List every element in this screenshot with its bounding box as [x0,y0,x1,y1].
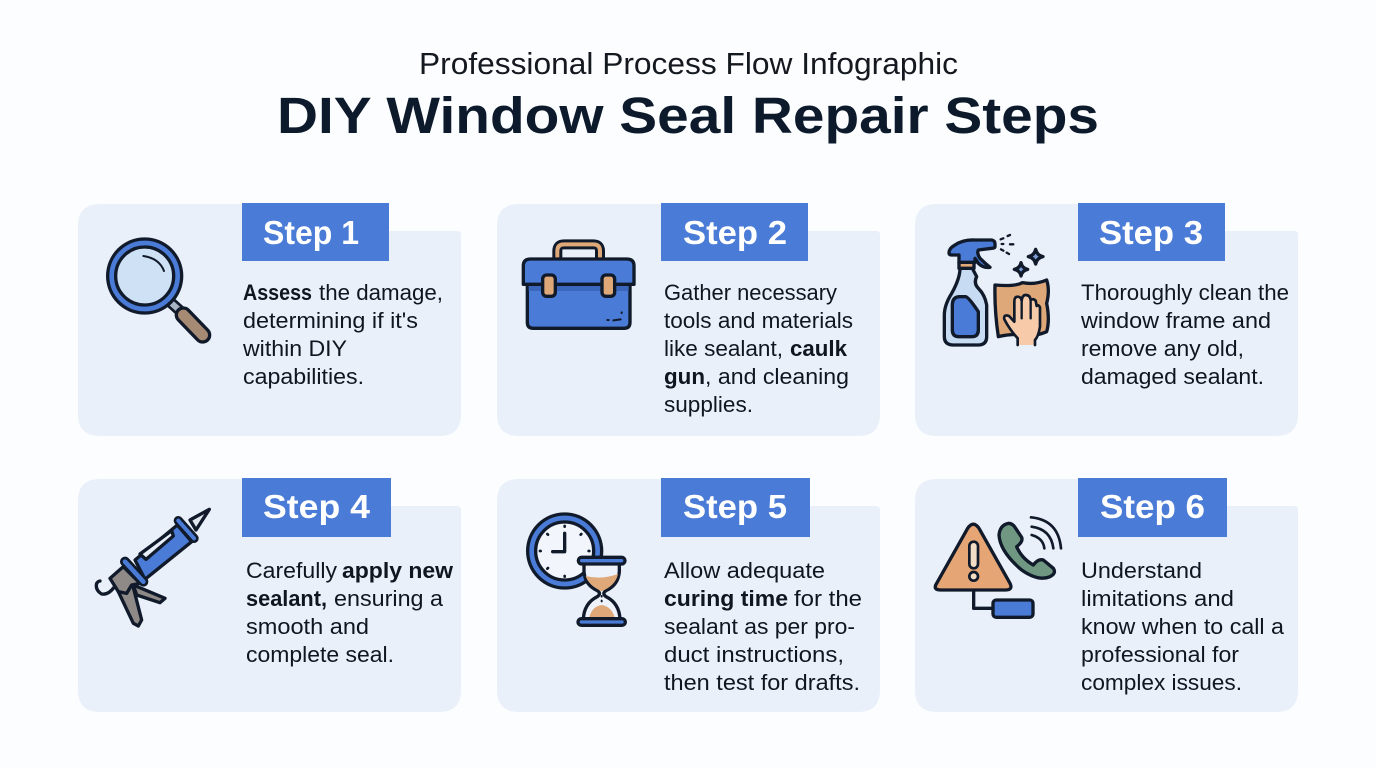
step 2 text: caulk [790,336,848,361]
step 4 text: apply new [342,558,454,583]
step 1 badge: Step 1 [263,214,359,251]
step 3 badge: Step 3 [1099,214,1203,251]
step 4 text: complete seal. [246,642,394,667]
step 4 text [246,558,454,667]
icon: warning triangle and phone [935,517,1061,617]
step 5 badge [661,478,810,537]
step 2 text: Gather necessary [664,280,837,305]
icon: clock and hourglass [528,514,625,625]
step 5 text: Allow adequate [664,558,825,583]
step 1 badge [242,203,389,261]
step 2 text: tools and materials [664,308,853,333]
panel: step 1 [78,203,461,436]
card background [497,204,880,436]
step 3 text: remove any old, [1081,336,1244,361]
step 6 text: professional for [1081,642,1239,667]
step 3 text: window frame and [1080,308,1271,333]
step 6 text [1081,558,1285,695]
step 1 text: the damage, [319,280,443,305]
icon: spray bottle and cloth [944,235,1048,345]
step 4 badge: Step 4 [263,488,371,525]
step 4 badge [242,478,391,537]
step 5 text [664,558,862,695]
card background [497,479,880,712]
step 2 text: supplies. [664,392,753,417]
card background [78,479,461,712]
panel: step 4 [78,478,461,712]
step 3 text: Thoroughly clean the [1081,280,1289,305]
panel: step 5 [497,478,880,712]
title: DIY Window Seal Repair Steps [277,87,1099,144]
step 6 text: know when to call a [1081,614,1285,639]
step 2 badge [661,203,808,261]
step 2 text [664,280,853,417]
step 5 text: then test for drafts. [664,670,860,695]
step 6 text: limitations and [1081,586,1234,611]
subtitle: Professional Process Flow Infographic [419,46,958,81]
step 1 text: capabilities. [243,364,364,389]
step 3 text: damaged sealant. [1081,364,1264,389]
panel: step 6 [915,478,1298,712]
step 6 badge: Step 6 [1100,488,1205,525]
step 3 text [1080,280,1289,389]
panel: step 2 [497,203,880,436]
icon: caulk gun [96,509,209,626]
step 2 text: like sealant, [664,336,783,361]
step 5 text: for the [794,586,862,611]
step 2 text: gun [664,364,705,389]
step 2 text: , and cleaning [705,364,849,389]
step 5 text: duct instructions, [664,642,844,667]
icon: magnifying glass [108,239,203,335]
panel: step 3 [915,203,1298,436]
step 1 text: within DIY [242,336,347,361]
step 6 text: complex issues. [1081,670,1242,695]
step 5 badge: Step 5 [683,488,787,525]
step 1 text: Assess [243,280,312,305]
step 4 text: sealant, [246,586,327,611]
step 1 text [242,280,443,389]
step 6 badge [1078,478,1227,537]
step 5 text: curing time [664,586,788,611]
step 4 text: ensuring a [334,586,444,611]
step 4 text: Carefully [246,558,337,583]
step 1 text: determining if it's [243,308,418,333]
step 5 text: sealant as per pro- [664,614,855,639]
step 6 text: Understand [1081,558,1202,583]
card background [78,204,461,436]
card background [915,479,1298,712]
step 2 badge: Step 2 [683,214,787,251]
step 4 text: smooth and [246,614,369,639]
icon: toolbox [523,244,634,328]
step 3 badge [1078,203,1225,261]
card background [915,204,1298,436]
